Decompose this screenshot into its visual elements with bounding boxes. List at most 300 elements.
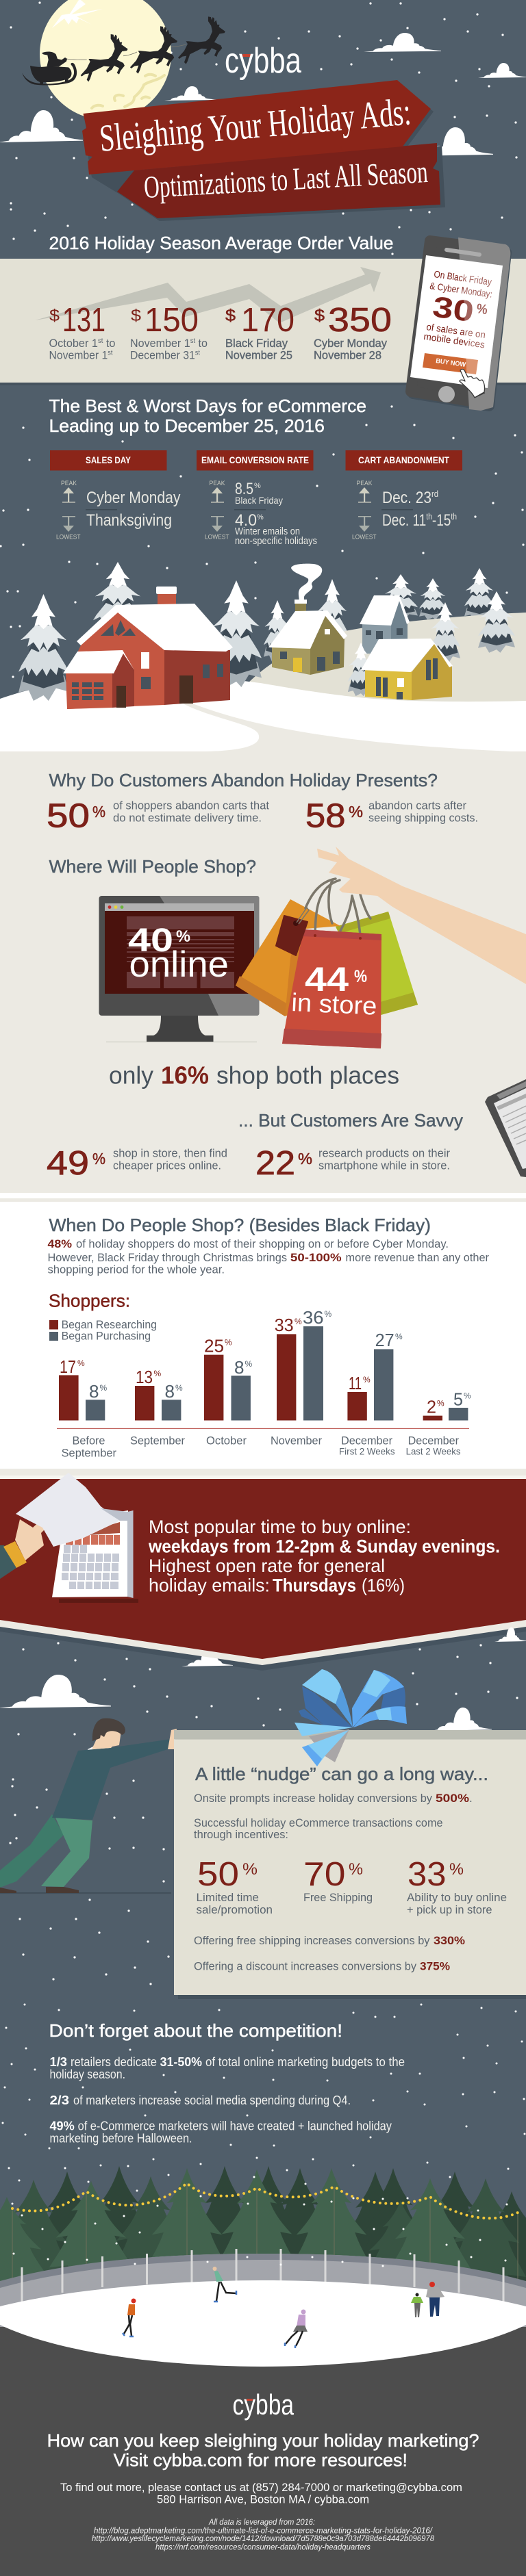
calendar date cells: [62, 1545, 119, 1589]
bag: red: [282, 929, 381, 1048]
illustration: snowy village: [0, 562, 526, 753]
skater: orange jacket: [123, 2298, 136, 2336]
price: cyber monday: Cyber Monday: [314, 337, 387, 350]
legend: [49, 1318, 157, 1343]
stat: 49 percent: [47, 1145, 227, 1182]
bars: before september: 17: [60, 1356, 76, 1377]
lowest value: Winter emails on: [235, 526, 300, 537]
sign: upper: [82, 80, 431, 175]
porch: [66, 673, 112, 709]
browser window: [105, 903, 254, 911]
bars: september: [135, 1367, 183, 1421]
fact two: of marketers increase social media spending during Q4.: [73, 2094, 351, 2107]
illustration: pine forest: [0, 2166, 526, 2294]
string lights: [12, 2183, 518, 2279]
incentive: buy online pick up: [407, 1856, 507, 1916]
phone button: [423, 353, 478, 374]
incentive: limited time: %: [242, 1860, 258, 1879]
lowest arrow: LOWEST: [205, 534, 229, 541]
callout: only 16 percent: 16%: [161, 1061, 209, 1090]
bars: december last 2 weeks: 2: [427, 1396, 436, 1417]
price: cyber monday: $: [314, 307, 325, 325]
bars: november: [275, 1307, 331, 1421]
heading: best and worst days: Leading up to December 25, 2016: [49, 415, 325, 436]
santa sleigh silhouette: [22, 44, 186, 86]
calendar red rows: [66, 1522, 120, 1545]
stat: 22 percent: 22: [255, 1145, 295, 1182]
torso and arm: [52, 1739, 171, 1820]
bow shadow tail: [309, 1729, 349, 1762]
tree left: [18, 594, 68, 701]
bag: green: [336, 912, 418, 1015]
bars: before september: 8: [89, 1381, 99, 1402]
footer call to action: Visit cybba.com for more resources!: [114, 2449, 408, 2470]
bag: red: %: [354, 967, 367, 986]
icon: calendar and hand: [0, 1473, 138, 1603]
stat: 50 percent: [47, 798, 269, 835]
peak arrow: [210, 480, 225, 502]
lowest arrow: LOWEST: [352, 534, 377, 541]
skater: purple coat: [285, 2309, 308, 2348]
phone: mobile sales: [410, 237, 510, 411]
incentive: buy online pick up: %: [449, 1860, 464, 1879]
peak value: [235, 480, 283, 506]
lowest value: %: [257, 513, 264, 521]
incentive: free shipping: Free Shipping: [303, 1891, 373, 1904]
cloud behind chevron: [181, 1648, 233, 1666]
phone text: 30: [431, 290, 476, 329]
peak arrow: [356, 480, 373, 502]
sign: lower: [117, 143, 440, 218]
bars: october: 25: [204, 1336, 224, 1356]
axis labels: December: [341, 1435, 392, 1447]
lowest value: Dec. 11: [382, 511, 438, 530]
tree by yellow house: [348, 643, 374, 696]
column: cart abandonment: [345, 450, 462, 541]
fact one: 1/3: [49, 2055, 67, 2069]
banner text: Most popular time to buy online:: [149, 1517, 411, 1537]
foreground snow: [0, 674, 526, 753]
heading: competition: Don’t forget about the competition!: [49, 2020, 342, 2041]
fact two: 2/3: [49, 2094, 69, 2107]
light poles: [12, 2183, 518, 2279]
arm and hand: [317, 847, 526, 984]
gift panel: [174, 1669, 526, 1999]
stat: 58 percent: abandon carts after: [368, 799, 466, 812]
price: november: December 31: [130, 349, 200, 361]
calendar page: [52, 1510, 128, 1597]
attic window: [101, 620, 136, 636]
phone speaker: [447, 250, 479, 255]
ice rink wall: [0, 2249, 526, 2327]
panel: popular time to buy: [0, 1479, 526, 1671]
chevron edge: [0, 1615, 526, 1665]
panel intro: Successful holiday eCommerce transactions come: [194, 1816, 442, 1829]
mid trees: [0, 2176, 526, 2288]
stat: 50 percent: of shoppers abandon carts that: [113, 799, 269, 812]
price: october: 131: [62, 302, 105, 339]
collar: [88, 1744, 111, 1752]
stat: 58 percent: 58: [305, 798, 345, 835]
price: october: November 1: [49, 349, 112, 361]
panel intro: Onsite prompts increase holiday conversions by: [194, 1792, 432, 1805]
free shipping stat: 330%: [434, 1934, 465, 1947]
bars: october: [204, 1336, 252, 1421]
stat: 22 percent: smartphone while in store.: [318, 1159, 450, 1172]
price: november: st: [195, 349, 200, 357]
bow left lower ribbon: [299, 1709, 324, 1725]
fact three: 49%: [49, 2120, 75, 2133]
clouds: header sky: [0, 33, 526, 156]
bars: december last 2 weeks: 5: [453, 1389, 463, 1410]
bars: september: %: [153, 1369, 162, 1378]
stat: 58 percent: %: [349, 803, 363, 821]
column header: CART ABANDONMENT: [358, 454, 449, 465]
banner text: Highest open rate for general: [149, 1556, 385, 1576]
price: october: st: [98, 337, 103, 345]
axis labels: Last 2 Weeks: [406, 1446, 460, 1457]
price: november: $: [131, 307, 141, 325]
lowest value: non-specific holidays: [235, 536, 317, 547]
price: black friday: [225, 302, 295, 361]
monitor stand: [147, 1016, 214, 1042]
bars: december first 2 weeks: %: [395, 1332, 403, 1341]
paragraph: 48%: [48, 1237, 72, 1250]
heading: average order value: 2016 Holiday Season Average Order Value: [49, 233, 393, 253]
bars: october: %: [225, 1337, 232, 1347]
moon: [40, 0, 171, 120]
price: november: [130, 302, 208, 361]
price: black friday: Black Friday: [225, 337, 288, 350]
lowest arrow: [205, 516, 229, 541]
price: october: st: [108, 349, 113, 357]
lowest value: [235, 511, 317, 547]
paragraph: shopping period for the whole year.: [48, 1263, 225, 1276]
bow lower right ribbon: [353, 1706, 407, 1727]
peak arrow: PEAK: [356, 480, 373, 487]
bow left loop: [302, 1686, 353, 1727]
axis labels: November: [271, 1435, 322, 1447]
heading: When Do People Shop? (Besides Black Friday): [49, 1215, 431, 1235]
bars: before september: %: [100, 1383, 107, 1393]
bars: november: %: [295, 1317, 302, 1326]
reindeer 2: [130, 26, 177, 74]
footer panel: [0, 2310, 526, 2576]
ribbon bow icon: [295, 1669, 407, 1766]
bars: december last 2 weeks: %: [437, 1399, 444, 1408]
bars: before september: [59, 1356, 107, 1421]
incentive: buy online pick up: Ability to buy online: [407, 1891, 507, 1904]
phone home button: [438, 386, 455, 402]
ice surface: [0, 2280, 526, 2367]
lowest value: th: [426, 511, 432, 521]
footer logo: cybba: [233, 2388, 295, 2421]
heading: customers are savvy: ... But Customers Are Savvy: [238, 1110, 463, 1131]
lowest arrow: [56, 516, 81, 541]
footer contact: To find out more, please contact us at (857) 284-7000 or marketing@cybba.com: [60, 2481, 462, 2494]
trend arrow: [35, 267, 381, 323]
bars: september: 13: [136, 1367, 153, 1387]
price: october: [49, 302, 116, 361]
panel intro: .: [469, 1792, 473, 1805]
clouds: middle sky: [0, 1627, 526, 1731]
snow roofs: [77, 604, 233, 652]
price: black friday: 170: [241, 302, 295, 339]
monitor text: %: [176, 927, 190, 946]
fact one: holiday season.: [49, 2068, 125, 2081]
bars: december first 2 weeks: 27: [375, 1330, 394, 1350]
fact one: [49, 2055, 405, 2081]
stat: 49 percent: shop in store, then find: [113, 1147, 227, 1160]
legend: Began Purchasing: [62, 1330, 151, 1343]
callout: only 16 percent: shop both places: [216, 1061, 399, 1090]
gift tag: [276, 907, 309, 955]
panel heading: A little “nudge” can go a long way...: [195, 1764, 488, 1784]
callout: only 16 percent: [109, 1061, 399, 1090]
footer contact: 580 Harrison Ave, Boston MA / cybba.com: [157, 2493, 369, 2506]
skaters: child and adult: [411, 2282, 444, 2317]
stat: 50 percent: do not estimate delivery time.: [113, 811, 262, 824]
monitor bezel: [99, 896, 259, 1016]
back trees: [26, 2166, 526, 2294]
shoppers heading: Shoppers:: [49, 1290, 130, 1311]
shopping bags: [236, 847, 526, 1048]
bars: october: 8: [234, 1357, 244, 1378]
hand on panel: [168, 1729, 177, 1749]
monitor text: 40: [128, 923, 173, 959]
phone text: [423, 268, 493, 350]
phone text: of sales are on: [426, 321, 486, 340]
stat: 22 percent: research products on their: [318, 1147, 450, 1160]
front trees: [0, 2168, 472, 2286]
price: black friday: November 25: [225, 349, 292, 361]
phone text: %: [475, 301, 488, 318]
stat: 49 percent: 49: [47, 1145, 89, 1182]
heading: abandon presents: Why Do Customers Abandon Holiday Presents?: [49, 770, 438, 790]
banner text: holiday emails:: [149, 1575, 270, 1596]
stat: 22 percent: [255, 1145, 450, 1182]
red banner: [0, 1479, 526, 1659]
incentive: limited time: [196, 1856, 273, 1916]
axis labels: First 2 Weeks: [339, 1446, 394, 1457]
price: october: October 1: [49, 337, 100, 350]
price: november: November 1: [130, 337, 194, 350]
falling snow stars: upper sky: [1, 3, 523, 1984]
moon crater: clouds: [92, 75, 164, 108]
banner text: (16%): [362, 1575, 405, 1596]
paragraph: 50-100%: [290, 1251, 342, 1264]
discount stat: 375%: [420, 1960, 450, 1973]
bag: red: in store: [291, 988, 377, 1020]
bars: november: 33: [275, 1315, 294, 1335]
fact three: of e-Commerce marketers will have created + launched holiday: [78, 2120, 392, 2133]
fact one: retailers dedicate: [71, 2055, 157, 2069]
falling snow stars: lower sky: [3, 2005, 525, 2266]
house windows and door: [141, 652, 149, 669]
section background: beige: [0, 751, 526, 1193]
incentive: buy online pick up: + pick up in store: [407, 1903, 492, 1916]
back shoe: [0, 1888, 16, 1893]
house: blue-gray: [360, 595, 410, 654]
panel intro: through incentives:: [194, 1828, 288, 1841]
bars: september: 8: [164, 1381, 175, 1402]
incentive: limited time: Limited time: [196, 1891, 259, 1904]
price: cyber monday: 350: [328, 302, 392, 339]
incentive: buy online pick up: 33: [408, 1856, 447, 1893]
lowest arrow: LOWEST: [56, 534, 81, 541]
axis labels: September: [130, 1435, 185, 1447]
price: october: to: [103, 337, 116, 350]
phone text: & Cyber Monday:: [429, 280, 493, 300]
panel intro: 500%: [436, 1792, 469, 1805]
paragraph: more revenue than any other: [345, 1251, 489, 1264]
head: [92, 1718, 125, 1749]
bars: september: %: [175, 1383, 183, 1393]
peak value: Black Friday: [235, 495, 283, 506]
stat: 50 percent: %: [92, 803, 105, 821]
hill trees: [348, 591, 515, 696]
stat: 49 percent: %: [92, 1150, 105, 1168]
column header: EMAIL CONVERSION RATE: [201, 454, 309, 465]
footer sources: [92, 2517, 434, 2552]
reindeer 3: [178, 16, 225, 64]
footer sources: All data is leveraged from 2016:: [208, 2517, 315, 2527]
chevron edge shadow: [0, 1627, 526, 1671]
house: yellow: [361, 639, 453, 700]
rink posts: [22, 2249, 503, 2306]
tablet icon: [485, 1079, 526, 1177]
phone button: BUY NOW: [436, 357, 466, 369]
bars: before september: %: [77, 1358, 85, 1368]
bar chart: [57, 1307, 471, 1460]
hill: [247, 613, 526, 705]
phone highlight: [458, 237, 510, 411]
bars: november: 36: [303, 1307, 323, 1328]
footer call to action: [47, 2430, 479, 2470]
bow right loop: [352, 1670, 404, 1727]
peak value: Cyber Monday: [86, 489, 181, 507]
bars: december last 2 weeks: [423, 1389, 471, 1421]
snow road and hills: [0, 704, 526, 756]
bag handles: [305, 879, 371, 937]
price: cyber monday: November 28: [314, 349, 381, 361]
footer sources: http://blog.adeptmarketing.com/the-ultimate-list-of-e-commerce-marketing-stats-for-holiday-2016/: [94, 2526, 434, 2536]
heading: where will people shop: Where Will People Shop?: [49, 856, 256, 877]
calendar shadow: [59, 1599, 138, 1603]
price: cyber monday: [314, 302, 392, 361]
fact three: marketing before Halloween.: [49, 2132, 192, 2146]
column header: SALES DAY: [86, 454, 132, 465]
peak value: Dec. 23: [382, 489, 439, 507]
reindeer 1: [81, 34, 128, 81]
peak value: rd: [431, 489, 438, 499]
incentive: free shipping: %: [349, 1860, 363, 1879]
incentive: limited time: sale/promotion: [196, 1903, 273, 1916]
light bulbs: [12, 2183, 518, 2218]
moon crater: white burst: [52, 0, 103, 28]
monitor text: [128, 923, 229, 985]
axis labels: September: [62, 1447, 116, 1460]
column: email conversion rate: [197, 450, 317, 547]
stat: 49 percent: cheaper prices online.: [113, 1159, 221, 1172]
free shipping stat: Offering free shipping increases conversions by: [194, 1934, 430, 1947]
panel: when do people shop: [0, 1193, 526, 1479]
front shoe: [46, 1887, 79, 1893]
cybba logo: cybba: [225, 41, 301, 81]
peak arrow: [61, 480, 77, 502]
paragraph: However, Black Friday through Christmas brings: [48, 1251, 287, 1264]
illustration: man pushing panel: [0, 1718, 177, 1893]
axis labels: Before: [73, 1435, 105, 1447]
phone screen: [410, 255, 503, 388]
hand cursor icon: [460, 370, 485, 398]
hand: [15, 1515, 53, 1560]
banner text: [148, 1517, 500, 1596]
axis labels: December: [408, 1435, 459, 1447]
lowest value: th: [451, 511, 457, 521]
lowest value: Thanksgiving: [86, 511, 172, 530]
discount stat: Offering a discount increases conversions by: [194, 1960, 416, 1973]
column header: [50, 450, 167, 471]
bag: orange: [236, 899, 340, 1016]
footer sources: http://www.yeslifecyclemarketing.com/node/1412/download/7d5788e0c9a703d788de64442b096978: [92, 2534, 434, 2543]
paragraph: of holiday shoppers do most of their shopping on or before Cyber Monday.: [76, 1237, 449, 1250]
axis labels: [62, 1435, 461, 1460]
column: sales day: [50, 450, 181, 541]
incentive: free shipping: [303, 1856, 373, 1904]
panel: average order value band: [0, 259, 526, 385]
text block: competition facts: [49, 2055, 405, 2146]
stat: 58 percent: seeing shipping costs.: [368, 811, 478, 824]
price: october: $: [49, 307, 60, 325]
price: november: 150: [145, 302, 199, 339]
bars: november: %: [325, 1309, 331, 1319]
background trees: [93, 562, 494, 662]
banner text: weekdays from 12-2pm & Sunday evenings.: [148, 1536, 500, 1557]
axis labels: October: [206, 1435, 247, 1447]
price: november: to: [195, 337, 208, 350]
footer sources: https://nrf.com/resources/consumer-data/holiday-headquarters: [155, 2542, 371, 2552]
phone text: mobile devices: [423, 331, 486, 350]
peak arrow: PEAK: [61, 480, 77, 487]
bars: december first 2 weeks: 11: [349, 1373, 362, 1393]
banner text: Thursdays: [273, 1575, 356, 1596]
bars: october: %: [245, 1359, 252, 1369]
front leg: [41, 1818, 92, 1887]
bars: december last 2 weeks: %: [464, 1391, 471, 1400]
stat: 58 percent: [305, 798, 478, 835]
peak value: %: [254, 482, 261, 490]
house: olive: [268, 564, 347, 675]
peak arrow: PEAK: [210, 480, 225, 487]
stat: 22 percent: %: [298, 1150, 312, 1168]
incentive: limited time: 50: [197, 1856, 239, 1893]
bag: red: 44: [305, 960, 349, 999]
paragraph: [48, 1237, 489, 1276]
fact one: of total online marketing budgets to the: [205, 2055, 405, 2069]
fact one: 31-50%: [160, 2055, 202, 2069]
stat: 50 percent: 50: [47, 798, 90, 835]
column header: [345, 450, 462, 471]
footer call to action: How can you keep sleighing your holiday marketing?: [47, 2430, 479, 2451]
back leg: [0, 1814, 64, 1888]
house: large red: [63, 587, 233, 709]
legend: Began Researching: [62, 1318, 157, 1331]
monitor: online 40 percent: [99, 896, 259, 1042]
peak value: 8.5: [235, 480, 253, 498]
lowest value: -15: [432, 511, 451, 530]
price: black friday: $: [225, 307, 236, 325]
